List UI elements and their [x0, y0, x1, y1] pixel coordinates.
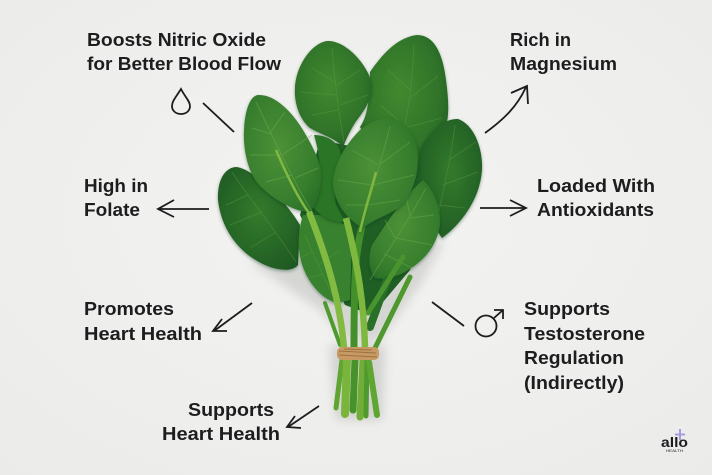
- label: Testosterone: Testosterone: [524, 323, 645, 344]
- label: Supports: Supports: [188, 399, 274, 420]
- label: Magnesium: Magnesium: [510, 53, 617, 74]
- leaf: lower right: [369, 180, 440, 280]
- label: Antioxidants: Antioxidants: [537, 199, 654, 220]
- arrow: bottom heart health: [287, 406, 319, 428]
- arrow: heart health: [213, 303, 252, 331]
- arrow: antioxidants: [480, 200, 526, 216]
- spinach bunch illustration: [218, 35, 482, 420]
- label: Heart Health: Heart Health: [162, 423, 280, 444]
- arrow: magnesium: [485, 86, 528, 133]
- leaf: top right: [360, 35, 448, 170]
- leaf: small middle: [312, 135, 345, 222]
- label: Rich in: Rich in: [510, 29, 571, 50]
- leaf: lower middle: [299, 215, 352, 303]
- twine: [337, 347, 379, 360]
- logo: allo health: [661, 429, 688, 453]
- leaf: far right: [420, 119, 482, 238]
- label: for Better Blood Flow: for Better Blood Flow: [87, 53, 282, 74]
- logo subtext: HEALTH: [666, 448, 683, 453]
- label: Folate: Folate: [84, 199, 140, 220]
- front stems: [309, 212, 365, 348]
- label: High in: High in: [84, 175, 148, 196]
- leaf: top centre: [295, 41, 372, 147]
- arrow line: nitric oxide: [203, 103, 234, 132]
- logo mark: [675, 429, 685, 440]
- stems: [325, 227, 410, 417]
- label: Loaded With: Loaded With: [537, 175, 655, 196]
- leaf: inner dark backing: [300, 140, 425, 315]
- label: Heart Health: Heart Health: [84, 323, 202, 344]
- leaf: front centre: [333, 118, 418, 232]
- logo wordmark: allo: [661, 434, 688, 450]
- arrow: folate: [158, 200, 209, 217]
- icon: water drop: [172, 89, 190, 114]
- leaf: far left: [218, 167, 300, 270]
- label: (Indirectly): (Indirectly): [524, 372, 624, 393]
- label: Boosts Nitric Oxide: Boosts Nitric Oxide: [87, 29, 266, 50]
- label: Promotes: Promotes: [84, 298, 174, 319]
- label: Supports: Supports: [524, 298, 610, 319]
- leaf: front left: [244, 95, 321, 213]
- icon: male symbol: [476, 310, 503, 336]
- arrow line: testosterone: [432, 302, 464, 326]
- label: Regulation: Regulation: [524, 347, 624, 368]
